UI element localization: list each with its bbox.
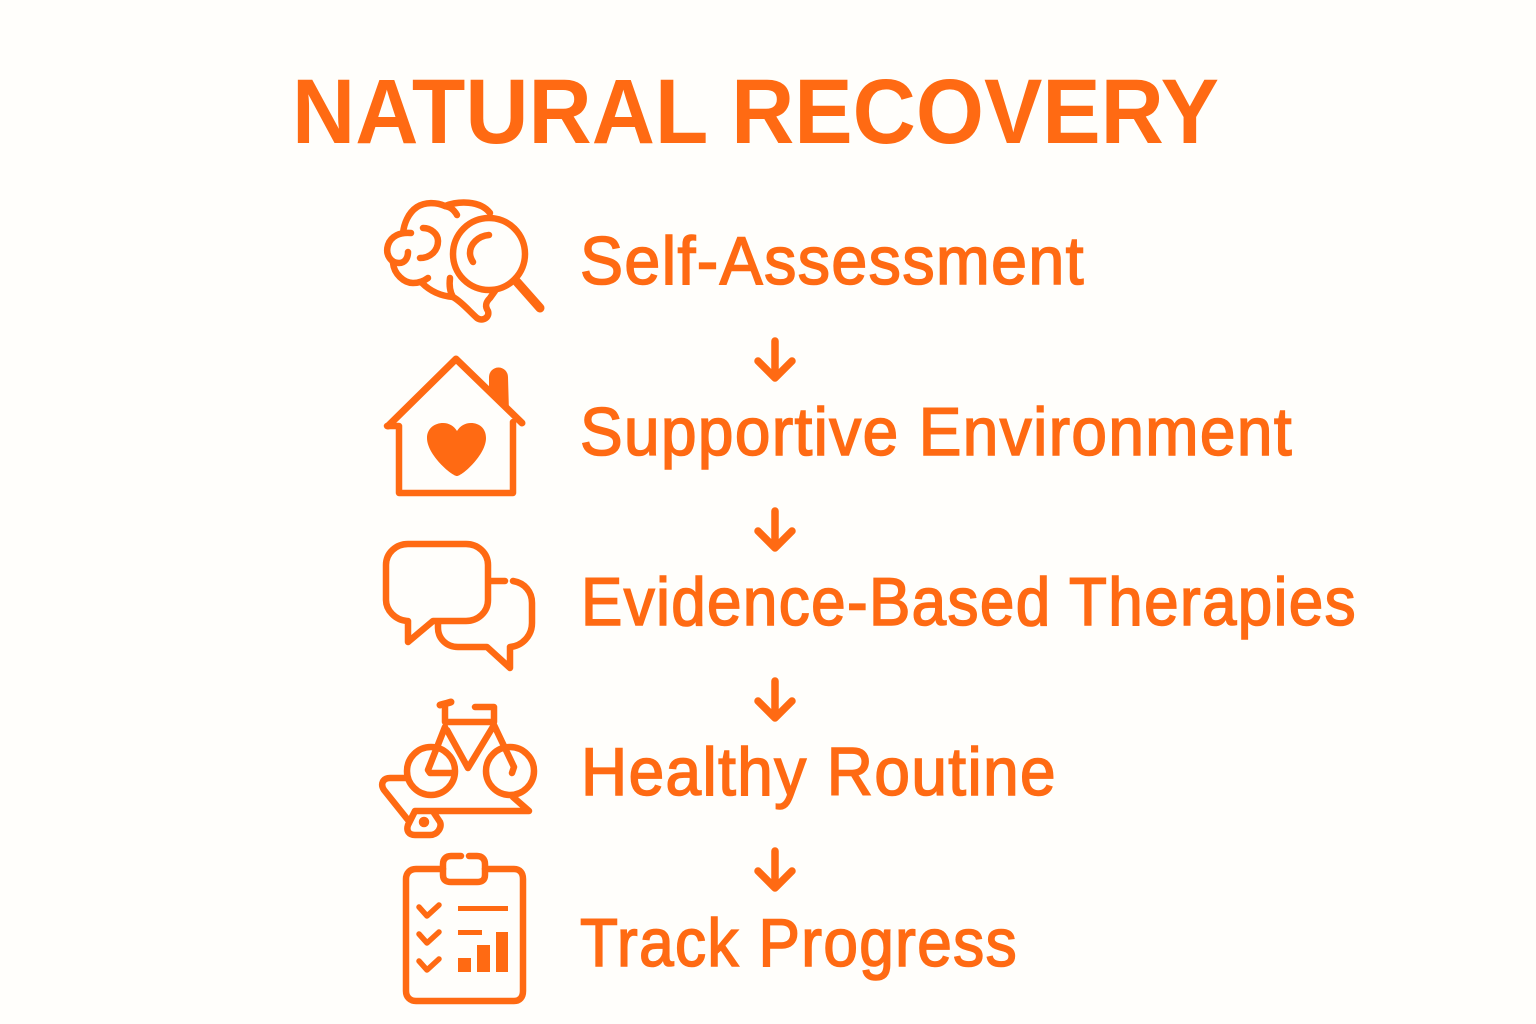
step 3 label: Evidence-Based Therapies: Evidence-Based Therapies: [581, 564, 1357, 640]
step 4 label: Healthy Routine: Healthy Routine: [581, 734, 1057, 810]
icon: bicycle on path: [382, 702, 534, 835]
icon: speech bubbles: [386, 544, 532, 668]
arrow 1: [758, 341, 792, 378]
icon: clipboard with checks and chart: [406, 856, 523, 1001]
step 2 label: Supportive Environment: Supportive Environment: [580, 394, 1293, 470]
step 5 label: Track Progress: Track Progress: [580, 905, 1018, 981]
step 1 label: Self-Assessment: Self-Assessment: [580, 223, 1085, 299]
icon: brain with magnifying glass: [387, 203, 540, 319]
arrow 3: [758, 681, 792, 718]
arrow 2: [758, 511, 792, 548]
icon: house with heart: [387, 359, 522, 493]
title: NATURAL RECOVERY: [292, 61, 1219, 163]
arrow 4: [758, 851, 792, 888]
